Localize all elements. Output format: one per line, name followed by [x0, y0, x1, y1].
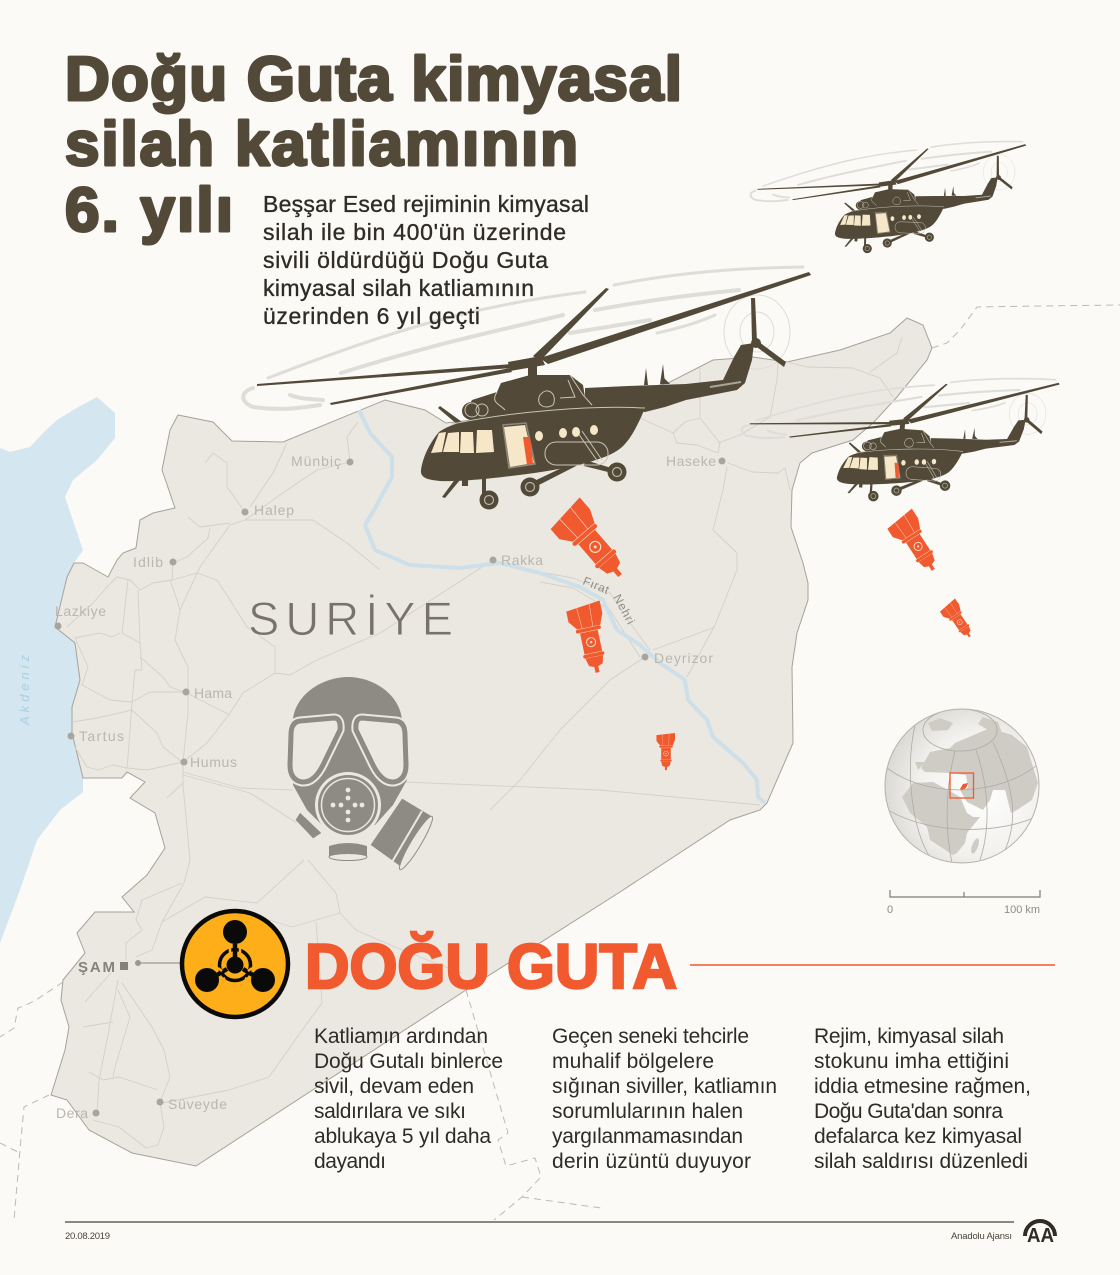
text column 1: saldırılara ve sıkı — [314, 1100, 466, 1123]
footer rule — [65, 1221, 1014, 1223]
text column 1: Katliamın ardından — [314, 1025, 488, 1048]
label: SURİYE: SURİYE — [248, 592, 453, 645]
city labels: Humus — [190, 754, 237, 770]
icon: chemical weapon symbol — [182, 911, 288, 1017]
divider line — [690, 964, 1055, 966]
bomb 4 — [939, 598, 978, 643]
label: Akdeniz: Akdeniz — [17, 654, 32, 726]
subtitle text: silah ile bin 400'ün üzerinde — [263, 219, 566, 245]
title: Doğu Guta kimyasal — [65, 45, 682, 114]
map scale bar: 0 — [887, 904, 893, 916]
roads — [67, 337, 902, 1148]
subtitle text: sivili öldürdüğü Doğu Guta — [263, 247, 548, 273]
map: Syria — [51, 318, 932, 1166]
label: ŞAM with marker: ŞAM — [78, 959, 115, 976]
sea: Akdeniz — [0, 397, 115, 943]
city labels: Deyrizor — [654, 650, 713, 666]
map scale bar: 100 km — [1004, 904, 1040, 916]
text column 3 — [814, 1025, 1031, 1173]
city labels: Münbiç — [291, 453, 341, 469]
helicopter: top — [749, 132, 1026, 259]
helicopter: main — [243, 267, 811, 510]
text column 3: Doğu Guta'dan sonra — [814, 1100, 1003, 1123]
subtitle text — [263, 191, 589, 329]
text column 1: ablukaya 5 yıl daha — [314, 1125, 491, 1148]
text column 3: stokunu imha ettiğini — [814, 1050, 1009, 1073]
city labels — [54, 453, 726, 1121]
bomb 3 — [885, 509, 946, 579]
label: ŞAM with marker — [78, 959, 182, 976]
text column 2 — [552, 1025, 777, 1173]
city labels: Halep — [254, 502, 294, 518]
city labels: Rakka — [501, 552, 543, 568]
city labels: Hama — [194, 685, 232, 701]
helicopter: right — [737, 358, 1060, 514]
title — [65, 45, 682, 245]
city labels: Lazkiye — [55, 603, 106, 619]
bomb 5 — [656, 733, 675, 770]
text column 2: derin üzüntü duyuyor — [552, 1150, 751, 1173]
text column 2: Geçen seneki tehcirle — [552, 1025, 749, 1048]
logo: Anadolu Ajansı: AA — [1027, 1225, 1054, 1247]
text column 2: yargılanmamasından — [552, 1125, 743, 1148]
text column 2: sorumlularının halen — [552, 1100, 743, 1123]
icon: gas mask — [290, 677, 436, 872]
text column 3: iddia etmesine rağmen, — [814, 1075, 1031, 1098]
text column 3: silah saldırısı düzenledi — [814, 1150, 1028, 1173]
bomb 1 — [547, 497, 636, 590]
text column 1: sivil, devam eden — [314, 1075, 474, 1098]
text column 3: defalarca kez kimyasal — [814, 1125, 1022, 1148]
city labels: Dera — [56, 1105, 88, 1121]
city labels: Süveyde — [168, 1096, 227, 1112]
label: river name — [581, 574, 638, 627]
text column 1: Doğu Gutalı binlerce — [314, 1050, 503, 1073]
heading: DOĞU GUTA: DOĞU GUTA — [305, 932, 677, 1002]
neighbouring borders — [0, 305, 1120, 1220]
map scale bar — [887, 890, 1040, 916]
bomb 2 — [565, 600, 614, 676]
text column 2: muhalif bölgelere — [552, 1050, 714, 1073]
globe locator — [885, 709, 1040, 863]
title: silah katliamının — [65, 110, 578, 179]
label: river name: Nehri — [610, 592, 638, 627]
footer date: 20.08.2019 — [65, 1231, 110, 1242]
subtitle text: Beşşar Esed rejiminin kimyasal — [263, 191, 589, 217]
city labels: Tartus — [79, 728, 124, 744]
text column 1 — [314, 1025, 503, 1173]
text column 3: Rejim, kimyasal silah — [814, 1025, 1004, 1048]
city labels: Haseke — [666, 453, 716, 469]
city labels: Idlib — [133, 554, 163, 570]
river: Fırat — [359, 410, 765, 803]
title: 6. yılı — [65, 176, 233, 245]
subtitle text: üzerinden 6 yıl geçti — [263, 303, 480, 329]
text column 1: dayandı — [314, 1150, 386, 1173]
label: river name: Fırat — [581, 574, 612, 597]
footer credit: Anadolu Ajansı — [951, 1231, 1012, 1242]
subtitle text: kimyasal silah katliamının — [263, 275, 534, 301]
text column 2: sığınan siviller, katliamın — [552, 1075, 777, 1098]
